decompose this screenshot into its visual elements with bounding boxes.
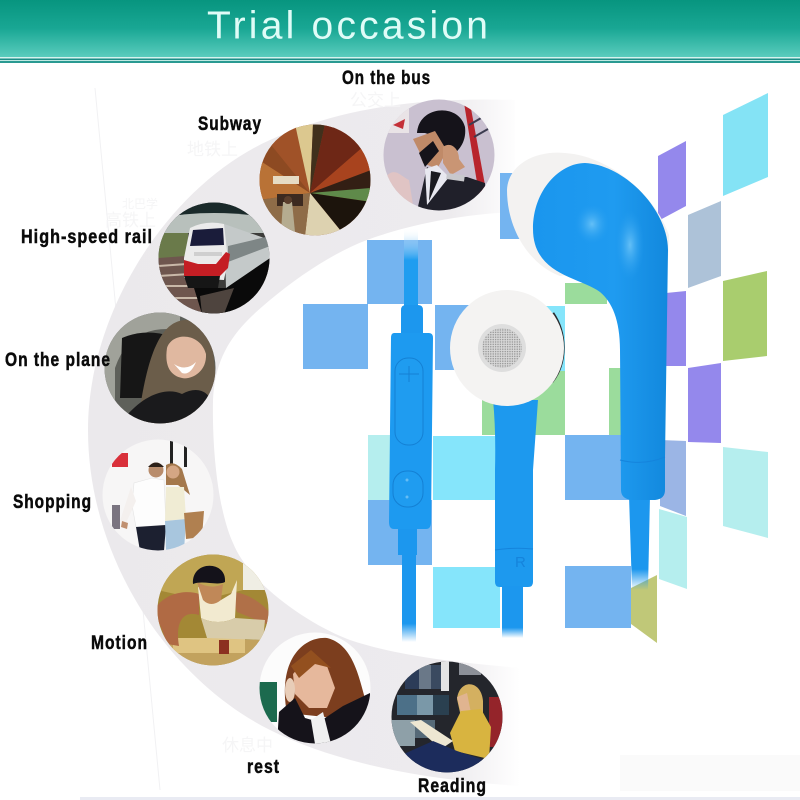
- ghost captions: 地铁上: [187, 140, 238, 159]
- label: on the plane: On the plane: [5, 350, 111, 371]
- ghost captions: 休息中: [222, 736, 273, 755]
- photo: on the plane: [104, 312, 216, 424]
- left cable and remote: [389, 228, 433, 642]
- photo: shopping: [102, 439, 214, 551]
- curved grey band: [88, 100, 520, 786]
- left earbud: R: [515, 554, 526, 571]
- earphones: [389, 153, 669, 642]
- right earbud: [507, 153, 669, 590]
- ghost captions: [105, 91, 401, 755]
- label: reading: Reading: [418, 776, 487, 797]
- ghost captions: 高铁上: [105, 211, 156, 230]
- label: rest: rest: [247, 757, 280, 778]
- title: Trial occasion: [207, 4, 488, 48]
- left earbud: [450, 290, 564, 638]
- ghost captions: 公交上: [350, 91, 401, 110]
- label: subway: Subway: [198, 114, 262, 135]
- photo: rest: [259, 632, 371, 744]
- photo: on the bus: [383, 99, 495, 211]
- photo: high-speed rail: [158, 202, 270, 314]
- photo: reading: [391, 661, 503, 773]
- label: high-speed rail: High-speed rail: [21, 227, 153, 248]
- label: on the bus: On the bus: [342, 68, 431, 89]
- label: motion: Motion: [91, 633, 148, 654]
- header banner: [0, 0, 800, 63]
- ghost captions: 北巴学: [122, 196, 158, 211]
- photo: subway: [259, 124, 371, 236]
- checker squares behind earphones: [303, 93, 768, 643]
- label: shopping: Shopping: [13, 492, 92, 513]
- photo: motion: [157, 554, 269, 666]
